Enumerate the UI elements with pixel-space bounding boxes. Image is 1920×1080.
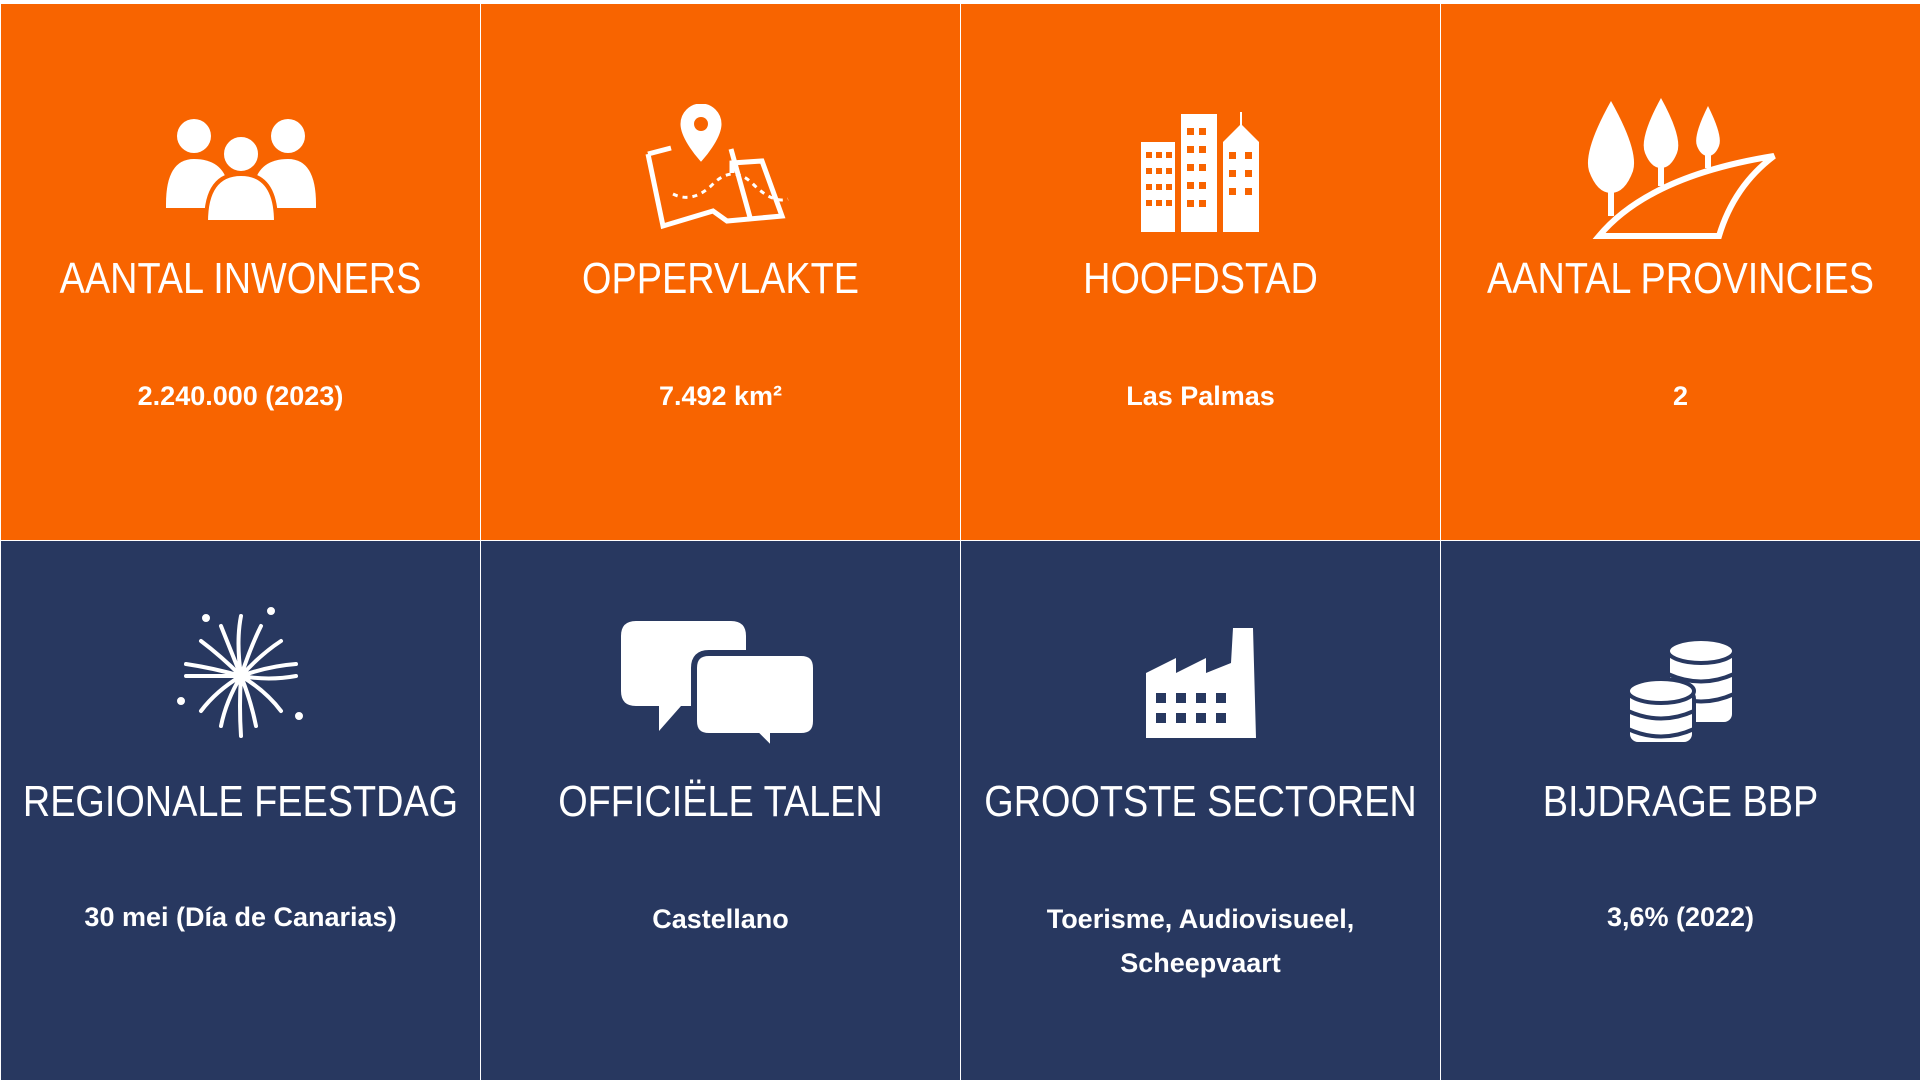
panel: provincies [1441,4,1920,540]
icon: factory [1146,628,1256,738]
title: AANTAL PROVINCIES [1487,254,1874,303]
title: HOOFDSTAD [1083,254,1318,303]
icon: trees and field [1588,98,1776,239]
title: REGIONALE FEESTDAG [23,777,458,826]
icon: map [646,104,788,230]
value: 2 [1673,381,1688,411]
title: GROOTSTE SECTOREN [984,777,1417,826]
value: 2.240.000 (2023) [138,381,343,411]
panel: sectoren [961,541,1440,1080]
panel: hoofdstad [961,4,1440,540]
value [1047,904,1354,978]
panel: inwoners [1,4,480,540]
value: 3,6% (2022) [1607,902,1754,932]
title: OFFICIËLE TALEN [558,777,883,826]
icon: buildings [1141,112,1259,232]
panel: talen [481,541,960,1080]
title: OPPERVLAKTE [582,254,859,303]
value: Scheepvaart [1120,948,1281,978]
value: 7.492 km² [659,381,782,411]
value: Toerisme, Audiovisueel, [1047,904,1354,934]
title: AANTAL INWONERS [60,254,421,303]
icon: speech bubbles [621,621,813,744]
value: Castellano [652,904,789,934]
panel: feestdag [1,541,480,1080]
panel: oppervlakte [481,4,960,540]
icon: people [166,119,316,220]
panel: bbp [1441,541,1920,1080]
value: Las Palmas [1126,381,1275,411]
title: BIJDRAGE BBP [1543,777,1818,826]
value: 30 mei (Día de Canarias) [84,902,397,932]
icon: coins [1630,641,1732,742]
icon: fireworks [177,607,303,738]
